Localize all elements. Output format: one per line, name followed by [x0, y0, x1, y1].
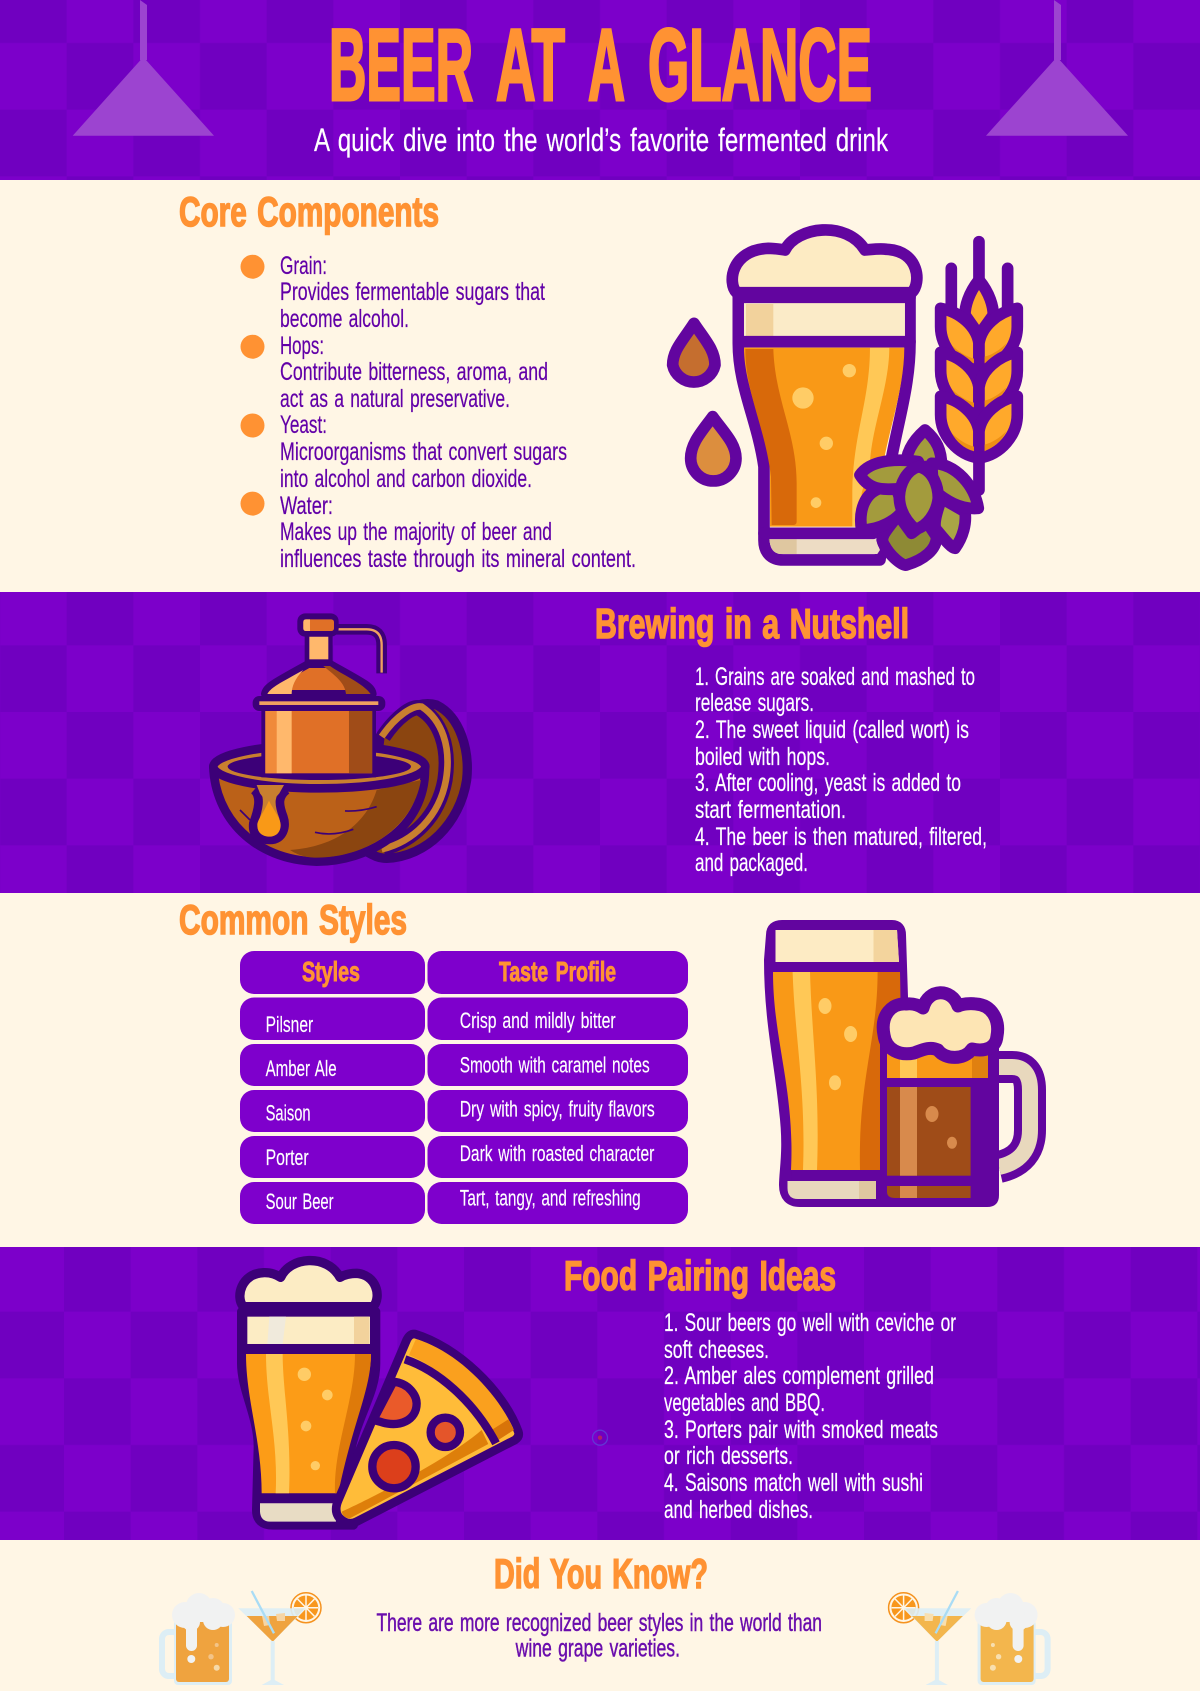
text: pairing list: soft cheeses. — [664, 1336, 769, 1364]
bullet: grain — [240, 255, 264, 279]
row: Sour Beer — [240, 1182, 688, 1224]
row: Pilsner — [240, 998, 688, 1040]
icon: left hanging lamp — [73, 0, 214, 136]
row: Amber Ale: Amber Ale — [266, 1056, 337, 1081]
text: brewing steps: 3. After cooling, yeast is added to — [695, 769, 961, 797]
text: brewing steps: 1. Grains are soaked and mashed to — [695, 663, 975, 691]
text: component descriptions: Contribute bitterness, aroma, and — [280, 358, 548, 386]
table header — [240, 951, 688, 994]
text: component descriptions: Provides fermentable sugars that — [280, 278, 545, 306]
bullet: hops — [240, 335, 264, 359]
title: A — [588, 8, 625, 122]
text: component descriptions: Water: — [280, 492, 333, 520]
row: Saison: Dry with spicy, fruity flavors — [460, 1097, 655, 1122]
icon: cocktail — [238, 1591, 321, 1685]
list: components — [240, 252, 636, 573]
title: AT — [496, 8, 565, 122]
icon: right hanging lamp — [986, 0, 1128, 136]
text: pairing list: vegetables and BBQ. — [664, 1389, 825, 1417]
title — [329, 8, 872, 122]
icon: brew kettle in a bowl — [213, 613, 467, 862]
icon: left mug and cocktail — [162, 1591, 321, 1685]
icon: beer glass and pizza slice — [240, 1261, 519, 1525]
icon: mug — [975, 1593, 1048, 1685]
heading: common styles: Common Styles — [179, 896, 407, 943]
text: fun fact — [376, 1609, 822, 1663]
text: fun fact: wine grape varieties. — [515, 1635, 680, 1663]
table header: Styles — [302, 956, 360, 987]
row: Saison — [240, 1090, 688, 1132]
text: component descriptions: Microorganisms that convert sugars — [280, 438, 567, 466]
subtitle: A quick dive into the world’s favorite fermented drink — [314, 122, 889, 158]
title: BEER — [329, 8, 473, 122]
text: pairing list — [664, 1309, 956, 1524]
panel: did you know — [0, 1540, 1200, 1691]
icon: beer glass — [240, 1261, 377, 1525]
icon: mug — [162, 1593, 235, 1685]
text: pairing list: 2. Amber ales complement grilled — [664, 1362, 934, 1390]
text: brewing steps: start fermentation. — [695, 796, 846, 824]
text: component descriptions: Grain: — [280, 252, 327, 280]
row: Porter: Dark with roasted character — [460, 1141, 654, 1166]
icon: pizza slice — [336, 1334, 519, 1523]
icon: open shell half — [367, 704, 467, 858]
text: fun fact: There are more recognized beer styles in the world than — [376, 1609, 822, 1637]
panel: food pairing ideas — [0, 1247, 1200, 1540]
text: pairing list: 1. Sour beers go well with ceviche or — [664, 1309, 956, 1337]
bullet: water — [240, 492, 264, 516]
icon: kettle tank — [253, 613, 385, 777]
row: Amber Ale — [240, 1044, 688, 1086]
text: brewing steps — [695, 663, 987, 877]
table: styles and taste profiles — [240, 951, 688, 1224]
icon: beer glass with drops, wheat and hops — [673, 230, 1017, 565]
row: Pilsner: Crisp and mildly bitter — [460, 1008, 616, 1033]
icon: bowl — [213, 745, 425, 862]
text: component descriptions: into alcohol and carbon dioxide. — [280, 465, 532, 493]
icon: right mug and cocktail — [889, 1591, 1048, 1685]
text: component descriptions: become alcohol. — [280, 305, 409, 333]
heading: food pairing ideas: Food Pairing Ideas — [564, 1252, 836, 1299]
icon: cocktail — [889, 1591, 971, 1685]
text: pairing list: 4. Saisons match well with sushi — [664, 1469, 923, 1497]
text: brewing steps: 4. The beer is then matured, filtered, — [695, 823, 987, 851]
text: component descriptions — [280, 252, 636, 573]
heading: brewing in a nutshell: Brewing in a Nutshell — [595, 600, 909, 647]
icon: drops — [673, 323, 736, 481]
icon: hop cone — [860, 430, 978, 565]
marker: small ring — [592, 1430, 608, 1445]
icon: pint glass — [732, 230, 917, 560]
text: pairing list: 3. Porters pair with smoked meats — [664, 1416, 938, 1444]
text: brewing steps: boiled with hops. — [695, 743, 830, 771]
icon: tall beer glass — [770, 926, 905, 1201]
icon: beer mug — [880, 993, 1030, 1207]
bullet: yeast — [240, 414, 264, 438]
text: pairing list: and herbed dishes. — [664, 1496, 813, 1524]
row: Amber Ale: Smooth with caramel notes — [460, 1053, 650, 1078]
row: Porter — [240, 1136, 688, 1178]
title: GLANCE — [648, 8, 872, 122]
panel: brewing in a nutshell — [0, 592, 1200, 893]
row: Pilsner: Pilsner — [266, 1012, 313, 1037]
icon: wheat — [941, 242, 1017, 490]
heading: did you know: Did You Know? — [494, 1550, 708, 1597]
text: brewing steps: and packaged. — [695, 849, 808, 877]
text: component descriptions: Hops: — [280, 332, 324, 360]
row: Sour Beer: Tart, tangy, and refreshing — [460, 1186, 641, 1211]
panel: common styles — [0, 893, 1200, 1247]
icon: tall beer glass and mug — [770, 926, 1030, 1207]
text: brewing steps: 2. The sweet liquid (called wort) is — [695, 716, 969, 744]
panel: header — [0, 0, 1200, 180]
panel: core components — [0, 180, 1200, 592]
text: component descriptions: Makes up the majority of beer and — [280, 518, 552, 546]
text: component descriptions: act as a natural preservative. — [280, 385, 510, 413]
row: Sour Beer: Sour Beer — [266, 1189, 334, 1214]
row: Saison: Saison — [266, 1101, 311, 1126]
heading: core components: Core Components — [179, 188, 439, 235]
text: component descriptions: Yeast: — [280, 411, 327, 439]
text: component descriptions: influences taste through its mineral content. — [280, 545, 636, 573]
table header: Taste Profile — [499, 956, 616, 987]
text: pairing list: or rich desserts. — [664, 1442, 793, 1470]
row: Porter: Porter — [266, 1145, 309, 1170]
text: brewing steps: release sugars. — [695, 689, 814, 717]
